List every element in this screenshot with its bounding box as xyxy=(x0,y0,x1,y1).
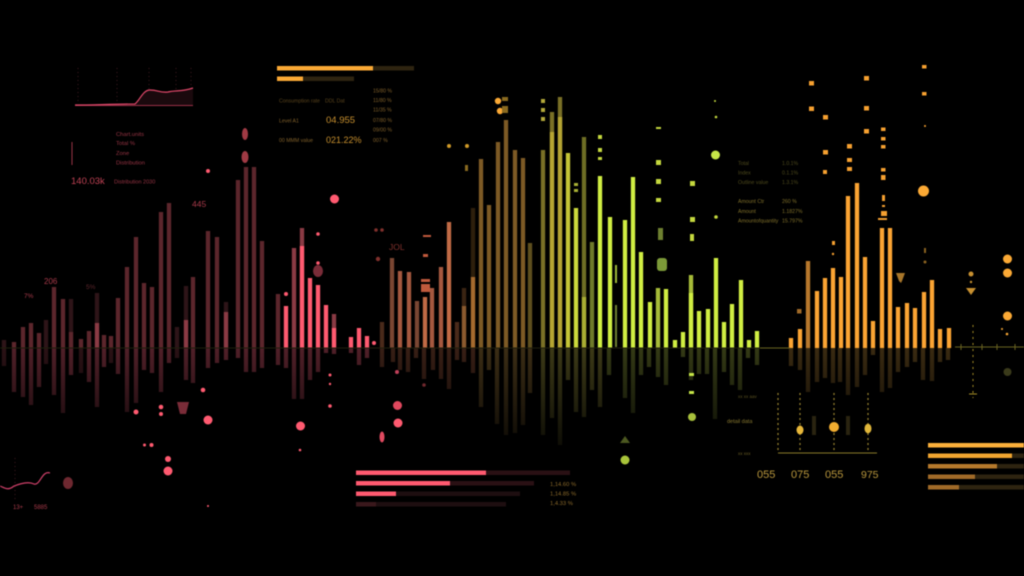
bottom pink progress bars xyxy=(356,470,570,506)
bars: orange-brown section xyxy=(382,120,530,348)
bars: lime section xyxy=(600,176,757,348)
amber text table: 04.955 xyxy=(326,115,355,126)
vertical dotted marker right xyxy=(969,325,1012,398)
pink text block: Distribution 2030 xyxy=(114,180,155,186)
olive text block: 1.3.1% xyxy=(782,180,799,186)
amber text table: 11/35 % xyxy=(373,108,392,114)
bottom bar labels: 1,4.33 % xyxy=(550,501,573,507)
icons: pink figures xyxy=(63,128,323,489)
pink text block: Distribution xyxy=(116,160,145,166)
olive and lime squares xyxy=(541,99,718,347)
lollipop axis labels: 075 xyxy=(791,469,809,481)
pink chart labels xyxy=(24,199,405,300)
pink text block: Total % xyxy=(116,141,135,147)
bars: olive section xyxy=(543,97,592,348)
lollipop axis labels: xx xx aav xyxy=(738,394,758,399)
pink chart labels: 5% xyxy=(86,284,96,291)
bottom-right amber bars xyxy=(928,443,1024,490)
pink text block: 140.03k xyxy=(71,176,105,187)
baseline segments xyxy=(0,344,1024,350)
olive text block: 1.1827% xyxy=(782,209,803,215)
pink text block: Chart.units xyxy=(116,132,144,138)
amber text table xyxy=(279,88,392,145)
amber text table: Level A1 xyxy=(279,118,299,124)
olive text block: 260 % xyxy=(782,199,797,205)
olive text block: 0.1.1% xyxy=(782,170,799,176)
amber squares xyxy=(797,65,926,314)
amber text table: 07/80 % xyxy=(373,118,392,124)
pink chart labels: JOL xyxy=(389,242,405,252)
amber text table: 00 MMM value xyxy=(279,138,313,144)
top-left line chart xyxy=(75,68,193,106)
amber and olive top icon xyxy=(447,97,508,171)
lollipop axis labels: 055 xyxy=(757,469,775,481)
lollipop axis labels: 975 xyxy=(861,469,879,481)
lollipop axis labels xyxy=(727,394,879,481)
bottom bar labels xyxy=(550,482,576,507)
top amber progress bars xyxy=(277,66,414,81)
amber text table: 09/00 % xyxy=(373,128,392,134)
olive text block: Index xyxy=(738,170,751,176)
lime dots xyxy=(620,150,720,464)
bottom bar labels: 1,14.60 % xyxy=(550,482,576,488)
olive text block: Amount xyxy=(738,209,756,215)
olive text block xyxy=(738,161,803,224)
bottom-left sparkline: 5885 xyxy=(34,505,48,511)
pink text block xyxy=(71,132,155,187)
small orange-red icon xyxy=(421,235,431,292)
olive text block: Amountofquantity xyxy=(738,218,779,224)
pink chart labels: 445 xyxy=(192,199,206,209)
lollipop axis labels: detail data xyxy=(727,419,753,425)
olive text block: 15.797% xyxy=(782,218,803,224)
amber text table: 15/80 % xyxy=(373,88,392,94)
lollipop axis labels: 055 xyxy=(825,469,843,481)
bars: amber section xyxy=(791,183,949,348)
pink chart labels: 7% xyxy=(24,293,34,300)
bars: pink section xyxy=(4,167,367,348)
pink text block: Zone xyxy=(116,151,129,157)
amber text table: 007 % xyxy=(373,138,388,144)
pink chart labels: 206 xyxy=(44,277,58,286)
bottom-left sparkline: 13+ xyxy=(13,505,24,511)
amber text table: 11/80 % xyxy=(373,98,392,104)
amber text table: DDL Dat xyxy=(325,98,345,104)
amber text table: Consumption rate xyxy=(279,98,320,104)
olive text block: 1.0.1% xyxy=(782,161,799,167)
lollipop axis labels: xx xxx xyxy=(738,451,751,456)
olive text block: Total xyxy=(738,161,749,167)
reflected bars below baseline xyxy=(4,348,948,445)
olive text block: Amount Ctr xyxy=(738,199,765,205)
bottom bar labels: 1,14.85 % xyxy=(550,492,576,498)
dotted lollipop chart xyxy=(778,393,877,453)
olive text block: Outline value xyxy=(738,180,768,186)
amber dots xyxy=(896,186,1012,335)
amber text table: 021.22% xyxy=(326,135,362,145)
bottom-left sparkline xyxy=(0,458,50,511)
pink dots xyxy=(134,169,426,507)
